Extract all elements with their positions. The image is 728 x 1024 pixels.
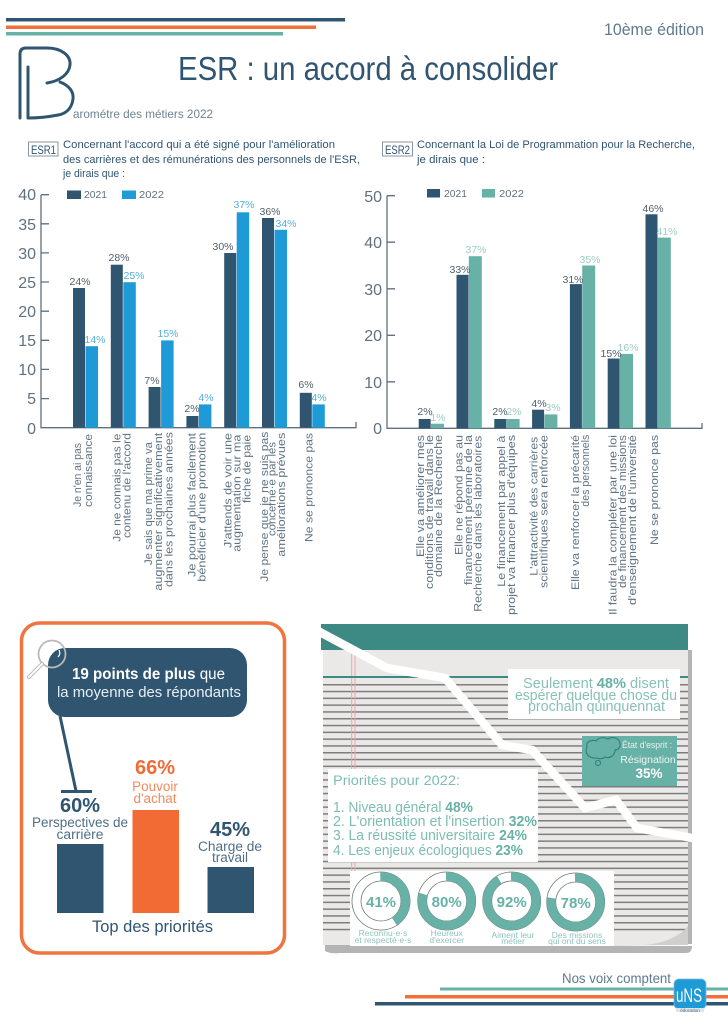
category labels: Ne se prononce pas [649,434,661,545]
value labels: 15% [157,328,179,340]
bar: pouvoir d'achat: d'achat [133,791,177,806]
panel: ESR2 question: je dirais que : [416,154,485,166]
header band [321,624,688,650]
donut: 78% missions [547,873,606,946]
panel: ESR2 question: ESR2 [385,143,410,157]
category labels [415,434,661,615]
callout: état d'esprit [582,736,677,786]
panel: ESR2 question: Concernant la Loi de Programmation pour la Recherche, [417,139,695,151]
value labels: 14% [84,334,106,346]
value labels [69,199,327,415]
bar: perspectives de carrière: Perspectives de [32,815,128,830]
donut: 92% aiment [483,872,541,946]
bar: charge de travail: travail [212,850,248,865]
category labels: des personnels [580,434,592,507]
header colour bars [6,18,345,36]
category labels: améliorations prévues [276,432,288,557]
value labels: 2% [492,406,508,418]
category labels: Elle va renforcer la précarité [570,435,582,590]
priorities list [328,769,538,862]
value labels: 15% [600,348,622,360]
legend [427,188,524,200]
axis and ticks: 5 [27,391,36,408]
donut: 80% heureux: Heureux [431,928,464,938]
bar chart: ESR2 [364,188,702,615]
panel: ESR1 question: Concernant l'accord qui a été signé pour l'amélioration [63,139,335,151]
axis and ticks [18,187,356,438]
paper curl [645,926,688,945]
category labels: scientifiques sera renforcée [539,435,551,588]
category labels: Le financement par appel à [496,435,508,587]
category labels: financement pérenne de la [463,434,475,585]
category labels: connaissance [83,434,95,507]
category labels: Elle va améliorer mes [415,434,427,557]
logo: barometre B: arométre des métiers 2022 [73,107,213,121]
value labels: 4% [198,392,214,404]
edition label: 10ème édition [604,20,704,39]
category labels: Je ne connais pas le [112,434,124,542]
top rule [323,676,688,678]
axis caption: Top des priorités [92,917,213,936]
value labels: 30% [212,241,234,253]
value labels: 4% [311,392,327,404]
icon: thought cloud [586,738,620,766]
bars 2022 [86,212,325,428]
bars 2021 [73,218,312,428]
callout: état d'esprit: État d'esprit : [622,740,672,750]
value labels: 36% [259,206,281,218]
category labels [72,431,316,591]
bar: charge de travail: 45% [210,819,250,841]
axis and ticks: 30 [364,282,382,299]
logo: UNSA: éducation [680,1008,700,1013]
callout: état d'esprit: 35% [635,766,663,781]
priorities list: 3. La réussité universitaire 24% [333,827,527,844]
panel: ESR1 question: des carrières et des rémunérations des personnels de l'ESR, [63,154,360,166]
value labels [417,203,678,424]
logo: UNSA: uNS [676,986,702,1007]
callout: la moyenne des répondants [57,685,241,701]
bars 2021 [419,214,658,428]
value labels: 7% [144,375,160,387]
logo: UNSA [674,979,706,1013]
bar: perspectives de carrière: carrière [56,827,104,842]
donut: 78% missions: Des missions [552,930,602,940]
donut: 92% aiment: 92% [497,894,527,911]
value labels: 1% [430,412,446,424]
legend [67,189,164,201]
donut: 80% heureux: d'exercer [429,935,464,945]
donut: 92% aiment: métier [501,936,525,946]
panel: ESR1 question: ESR1 [31,143,56,157]
bar chart: ESR1 [18,187,356,591]
value labels: 31% [562,274,584,286]
value labels: 37% [465,244,487,256]
panel: ESR1 question: je dirais que : [62,168,125,180]
bar: perspectives de carrière [32,795,128,913]
legend: 2022 [499,188,524,200]
category labels: projet va financer plus d'équipes [506,434,518,615]
logo: barometre B [20,48,213,121]
category labels: J'attends de voir une [223,433,235,548]
priorities list: 2. L'orientation et l'insertion 32% [333,813,537,830]
category labels: concerné·e par les [267,441,279,536]
value labels: 3% [545,402,561,414]
bar: charge de travail [198,819,262,913]
category labels: conditions de travail dans le [424,435,436,589]
panel: ESR1 question [28,139,360,180]
donut stats [350,871,614,946]
panel border [22,623,284,953]
donut: 80% heureux [418,872,476,945]
callout [48,648,247,717]
legend: 2022 [139,189,164,201]
value labels: 2% [184,403,200,415]
priorities list: 4. Les enjeux écologiques 23% [333,842,523,859]
panel: top des priorités [22,623,284,953]
category labels: Je sais que ma prime va [143,441,155,565]
priorities list: 1. Niveau général 48% [333,799,473,816]
value labels: 25% [123,270,145,282]
title: ESR : un accord à consolider [178,50,558,87]
category labels: Je pourrai plus facilement [187,433,199,577]
category labels: bénéficier d'une promotion [197,433,209,582]
category labels: fiche de paie [242,435,254,503]
bar: pouvoir d'achat [132,757,179,913]
value labels: 4% [531,398,547,410]
margin lines [352,650,355,948]
value labels: 37% [233,199,255,211]
callout: quinquennat [508,669,680,719]
axis and ticks: 0 [373,421,382,438]
category labels: domaine de la Recherche [433,435,445,577]
donut: 80% heureux: 80% [432,894,462,911]
axis and ticks: 25 [18,275,36,292]
axis and ticks: 20 [18,304,36,321]
category labels: d'enseignement de l'université [627,435,639,605]
callout connector [60,716,92,792]
legend: 2021 [444,188,467,200]
value labels: 6% [298,379,314,391]
axis and ticks [364,189,702,438]
category labels: Je n'en ai pas [72,443,84,507]
donut: 41% reconnus: Reconnu·e·s [359,928,407,938]
bar: pouvoir d'achat: Pouvoir [132,779,178,794]
callout: état d'esprit: Résignation [620,754,676,766]
callout: 19 points de plus que [72,666,225,683]
footer tagline: Nos voix comptent [562,970,671,986]
callout: quinquennat: espérer quelque chose du [515,687,677,704]
axis and ticks: 50 [364,189,382,206]
category labels: dans les prochaines années [164,431,176,587]
legend: 2021 [84,189,107,201]
donut: 41% reconnus: et respecté·e·s [355,935,411,945]
panel: notebook page [318,624,698,953]
donut: 78% missions: 78% [561,895,591,912]
value labels: 28% [108,252,130,264]
value labels: 41% [656,226,678,238]
value labels: 34% [275,218,297,230]
axis and ticks: 40 [364,235,382,252]
category labels: contenu de l'accord [122,433,134,538]
donut: 92% aiment: Aiment leur [492,930,535,940]
paper [323,640,688,945]
value labels: 46% [642,203,664,215]
callout: quinquennat: Seulement 48% disent [523,675,670,692]
value labels: 2% [417,406,433,418]
value labels: 16% [617,342,639,354]
axis and ticks: 10 [364,375,382,392]
white trend line [318,631,698,839]
category labels: L'attractivité des carrières [529,436,541,576]
donut: 41% reconnus: 41% [366,894,396,911]
paper stack shadow [325,650,692,953]
ruled lines [323,684,688,931]
bar: pouvoir d'achat: 66% [135,757,175,779]
priorities list: Priorités pour 2022: [333,772,460,788]
bar: perspectives de carrière: 60% [60,795,100,817]
donut: 78% missions: qui ont du sens [548,936,606,946]
value labels: 24% [69,276,91,288]
category labels: Je pense que je ne suis pas [259,431,271,582]
panel: ESR2 question [382,139,695,166]
axis and ticks: 30 [18,246,36,263]
axis and ticks: 20 [364,328,382,345]
axis and ticks: 10 [18,362,36,379]
value labels: 35% [579,254,601,266]
axis and ticks: 15 [18,333,36,350]
category labels: augmenter significativement [153,433,165,591]
axis and ticks: 0 [27,421,36,438]
icon: magnifying glass [29,640,66,677]
category labels: de financement des missions [617,434,629,588]
axis and ticks: 40 [18,187,36,204]
footer colour bars [375,988,728,1006]
bars 2022 [431,238,671,428]
category labels: Ne se prononce pas [304,432,316,542]
category labels: Recherche dans les laboratoires [473,435,485,612]
value labels: 33% [449,264,471,276]
bar: charge de travail: Charge de [198,839,262,854]
axis and ticks: 35 [18,217,36,234]
callout: quinquennat: prochain quinquennat [528,698,666,715]
value labels: 2% [506,406,522,418]
category labels: Elle ne répond pas au [454,435,466,555]
category labels: augmentation sur ma [232,434,244,552]
donut: 41% reconnus [352,872,411,945]
category labels: Il faudra la compléter par une loi [608,435,620,615]
